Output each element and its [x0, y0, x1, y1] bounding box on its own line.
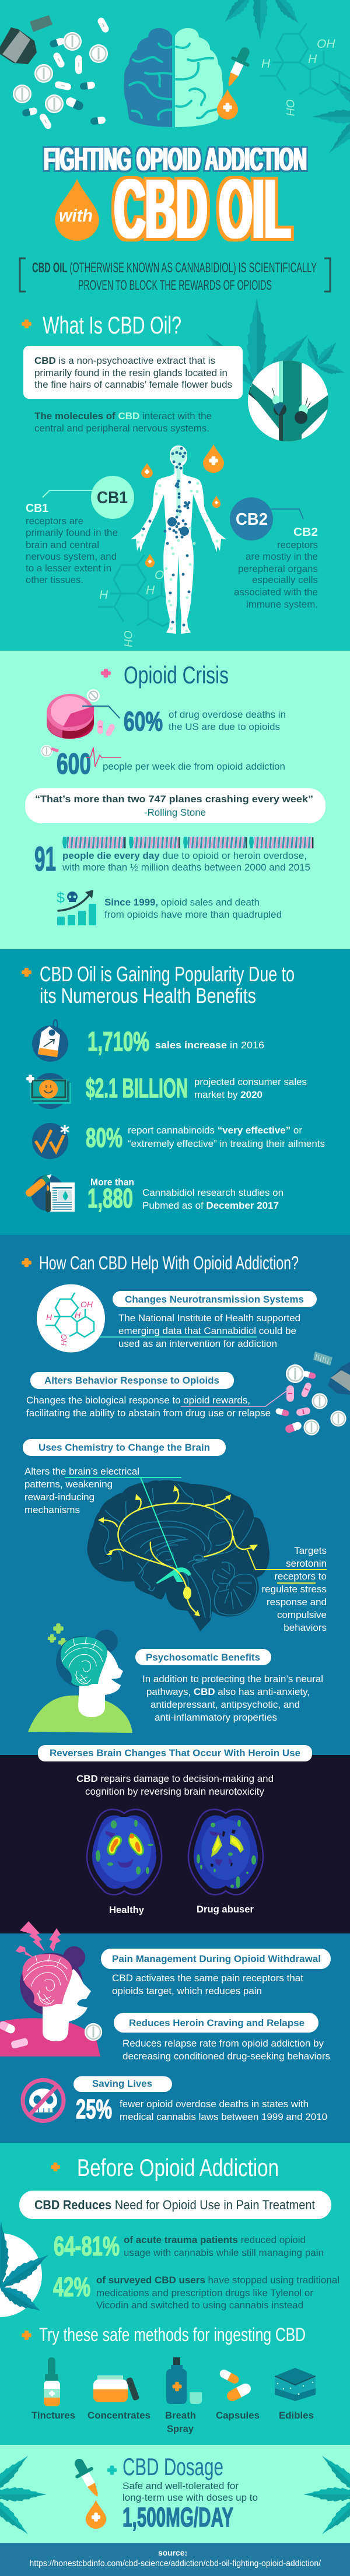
panel: alters behavior: Alters Behavior Response to Opioids: [44, 1375, 219, 1386]
stat: 42%: [53, 2272, 340, 2311]
callout: quote: [25, 788, 326, 823]
stat: 60%: of drug overdose deaths in: [169, 710, 286, 720]
icon: orange drop with "with": [55, 179, 99, 241]
icon: CBD molecule top right: H: [308, 52, 317, 66]
panel: changes neurotransmission: The National Institute of Health supported: [118, 1312, 300, 1324]
stat: 80%: report cannabinoids “very effective” or: [128, 1125, 302, 1136]
panel: saving lives: 25%: [76, 2094, 112, 2124]
callout: CB1: to a lesser extent in: [26, 563, 111, 574]
panel: psychosomatic benefits: antidepressant, antipsychotic, and: [150, 1699, 300, 1710]
stat: 80%: “extremely effective” in treating their ailments: [128, 1138, 325, 1149]
labels: ingestion methods: Breath: [165, 2410, 196, 2421]
panel: reduces heroin craving: Reduces relapse rate from opioid addiction by: [123, 2038, 324, 2049]
panel: psychosomatic benefits: [135, 1649, 323, 1723]
icon: dropper and drop: [68, 2455, 106, 2529]
text: since 1999: [104, 897, 282, 920]
panel: molecule circle: OH: [60, 1334, 68, 1346]
section background: popularity: [0, 949, 350, 1235]
chart: coffin row 91: [62, 837, 313, 848]
panel: saving lives: fewer opioid overdose deaths in states with: [120, 2098, 309, 2110]
title: [44, 141, 307, 256]
stat: 91: 91: [34, 840, 56, 878]
definition box: CBD is a non-psychoactive extract that is: [34, 356, 215, 366]
stat: 80%: 80%: [86, 1122, 123, 1153]
stat: $2.1 billion: market by 2020: [194, 1089, 262, 1100]
text: targets serotonin: receptors to: [274, 1571, 327, 1582]
panel: pain management: Pain Management During Opioid Withdrawal: [112, 1953, 321, 1964]
panel: saving lives: Saving Lives: [92, 2078, 152, 2089]
labels: ingestion methods: Tinctures: [32, 2410, 75, 2421]
section background: before addiction: [0, 2143, 350, 2445]
icon: scattered pills: [13, 16, 110, 130]
icon: tinctures: [44, 2357, 60, 2406]
icon: molecule behind body: OH: [155, 568, 173, 582]
panel: reduces heroin craving: [114, 2013, 330, 2062]
text: targets serotonin: behaviors: [284, 1622, 327, 1633]
icon: money with smiley: [26, 1073, 71, 1109]
stat: 91: people die every day due to opioid or heroin overdose,: [62, 851, 307, 861]
stat: 42%: Vicodin and switched to using cannabis instead: [96, 2300, 303, 2311]
panel: reduces heroin craving: Reduces Heroin Craving and Relapse: [129, 2017, 304, 2028]
text: CBD dosage: 1,500MG/DAY: [123, 2502, 233, 2532]
text: molecules interact: [34, 411, 212, 434]
panel: psychosomatic benefits: In addition to protecting the brain’s neural: [142, 1673, 323, 1684]
panel: saving lives: medical cannabis laws between 1999 and 2010: [120, 2111, 327, 2122]
callout: CB1: [26, 476, 134, 585]
panel: reverses brain changes: cognition by reversing brain neurotoxicity: [85, 1786, 264, 1797]
panel: reverses brain changes: CBD repairs damage to decision-making and: [76, 1773, 274, 1784]
heading: What Is CBD Oil?: What Is CBD Oil?: [43, 311, 181, 339]
panel: alters behavior: [26, 1372, 287, 1419]
panel: changes neurotransmission: [113, 1291, 317, 1349]
panel: uses chemistry: mechanisms: [24, 1504, 80, 1515]
callout: CBD reduces need: CBD Reduces Need for Opioid Use in Pain Treatment: [34, 2198, 315, 2212]
icon: CBD molecule top right: OH: [284, 99, 296, 116]
text: CBD dosage: long-term use with doses up to: [123, 2493, 258, 2503]
stat: 64-81%: [54, 2231, 324, 2261]
heading: CBD Oil is Gaining Popularity: its Numerous Health Benefits: [40, 984, 256, 1008]
labels: ingestion methods: [32, 2410, 314, 2434]
icon: brain left half: [124, 28, 172, 127]
icon: orange drop with "with": with: [59, 205, 93, 226]
illustration: brain cross-section: [65, 1477, 327, 1631]
illustration: head in pain: [0, 1921, 102, 2056]
icon: spilled pill bottle: [0, 15, 52, 64]
callout: CBD reduces need: [19, 2191, 331, 2219]
stat: 1,880 studies: Pubmed as of December 2017: [142, 1200, 279, 1211]
stat: 1,710%: 1,710%: [88, 1026, 149, 1057]
panel: uses chemistry: [23, 1439, 226, 1515]
labels: ingestion methods: Edibles: [279, 2410, 314, 2421]
stat: 1,880 studies: Cannabidiol research studies on: [142, 1187, 284, 1198]
footer: source: https://honestcbdinfo.com/cbd-science/addiction/cbd-oil-fighting-opioid-addiction/: [29, 2559, 321, 2568]
icon: large cannabis leaf behind definition box: [200, 297, 346, 408]
callout: CB1: primarily found in the: [26, 528, 118, 538]
stat: 600: people per week die from opioid addiction: [103, 761, 285, 772]
icon: dropper with oil drop: [217, 44, 256, 120]
heading: Opioid Crisis: [101, 661, 229, 689]
callout: quote: -Rolling Stone: [144, 807, 206, 818]
definition box: primarily found in the resin glands located in: [34, 368, 228, 378]
icon: rising sales chart with skull: [57, 890, 96, 925]
icon: price tag: [32, 1020, 68, 1062]
stat: 80%: [86, 1122, 325, 1153]
text: since 1999: from opioids have more than quadrupled: [104, 910, 282, 920]
stat: 1,710%: [88, 1026, 264, 1057]
panel: changes neurotransmission: used as an intervention for addiction: [118, 1338, 277, 1349]
stat: 42%: 42%: [53, 2272, 90, 2302]
label: healthy / drug abuser: Healthy: [109, 1904, 145, 1915]
stat: 60%: [124, 706, 286, 736]
callout: CB1: CB1: [26, 502, 48, 515]
chart: pie pill 60%: [47, 689, 120, 739]
panel: molecule circle: [37, 1284, 105, 1353]
panel: reduces heroin craving: decreasing conditioned drug-seeking behaviors: [123, 2051, 330, 2062]
stat: 1,880 studies: More than: [90, 1177, 134, 1188]
section background: pain management: [0, 1933, 350, 2143]
stat: 64-81%: usage with cannabis while still managing pain: [124, 2247, 324, 2258]
callout: CB2: perepheral organs: [238, 564, 318, 574]
icon: cannabis leaf in white circle: [0, 2221, 52, 2317]
labels: ingestion methods: Concentrates: [88, 2410, 150, 2421]
text: targets serotonin: regulate stress: [261, 1584, 327, 1595]
icon: no skull: [23, 2080, 64, 2121]
section background: dosage: [0, 2445, 350, 2543]
panel: changes neurotransmission: Changes Neurotransmission Systems: [125, 1294, 304, 1305]
footer: source: [29, 2548, 321, 2568]
panel: molecule circle: OH: [80, 1300, 93, 1309]
icon: oil drops around body: [141, 444, 224, 567]
panel: pain management: opioids target, which reduces pain: [112, 1985, 262, 1996]
stat: 64-81%: 64-81%: [54, 2231, 120, 2261]
callout: CB1: receptors are: [26, 516, 83, 527]
icon: check marks: [32, 1123, 69, 1159]
section background: brain scans: [0, 1755, 350, 1933]
icon: capsules: [218, 2368, 253, 2403]
callout: CB2: receptors: [277, 540, 318, 550]
text: molecules interact: The molecules of CBD interact with the: [34, 411, 212, 422]
stat: 42%: medications and prescription drugs like Tylenol or: [96, 2287, 313, 2298]
stat: 91: [34, 840, 310, 878]
icon: molecule behind body: H: [99, 588, 108, 602]
callout: CB1: other tissues.: [26, 575, 83, 585]
intro text with brackets: [20, 258, 330, 293]
callout: CB2: CB2: [236, 510, 268, 529]
icon: pills and bottle right: [275, 1352, 350, 1436]
text: targets serotonin: [261, 1545, 327, 1633]
stat: 600: 600: [57, 747, 91, 780]
section background: opioid crisis: [0, 651, 350, 949]
label: healthy / drug abuser: [109, 1904, 254, 1915]
panel: uses chemistry: reward-inducing: [24, 1491, 94, 1503]
icon: human body with receptors: [131, 445, 226, 634]
stat: 600: [41, 745, 285, 780]
panel: psychosomatic benefits: Psychosomatic Benefits: [146, 1652, 260, 1663]
stat: 60%: the US are due to opioids: [169, 722, 280, 732]
panel: uses chemistry: patterns, weakening: [24, 1479, 113, 1490]
labels: ingestion methods: Spray: [167, 2423, 194, 2434]
illustration: healthy brain scan: [87, 1809, 162, 1894]
icon: cannabis leaves top right: [220, 0, 350, 157]
section background: how CBD helps: [0, 1235, 350, 1755]
text: targets serotonin: response and: [267, 1596, 327, 1608]
stat: $2.1 billion: $2.1 BILLION: [86, 1073, 188, 1103]
heading: Before Opioid Addiction: Before Opioid Addiction: [77, 2154, 279, 2181]
labels: ingestion methods: Capsules: [216, 2410, 260, 2421]
definition box: the fine hairs of cannabis’ female flower buds: [34, 380, 232, 390]
callout: CB2: are mostly in the: [246, 552, 318, 562]
text: CBD dosage: CBD Dosage: [123, 2453, 223, 2480]
panel: pain management: [101, 1949, 331, 1996]
panel: reverses brain changes: [38, 1745, 312, 1797]
section background: footer: [0, 2543, 350, 2576]
callout: CB1: brain and central: [26, 540, 99, 550]
heading: CBD Oil is Gaining Popularity: [22, 962, 295, 1008]
icon: molecule behind body: OH: [121, 630, 134, 647]
panel: molecule circle: H: [75, 1310, 81, 1319]
illustration: drug abuser brain scan: [188, 1809, 263, 1894]
icon: research paper and vial: [24, 1171, 75, 1212]
panel: psychosomatic benefits: anti-inflammatory properties: [155, 1712, 277, 1723]
callout: CB2: immune system.: [246, 599, 318, 610]
callout: CB2: especially cells: [252, 575, 318, 585]
icon: trichome magnified circle: [248, 360, 328, 442]
icon: edibles: [275, 2368, 316, 2401]
text: CBD dosage: Safe and well-tolerated for: [123, 2481, 239, 2491]
panel: saving lives: [74, 2076, 327, 2124]
stat: 64-81%: of acute trauma patients reduced opioid: [124, 2234, 306, 2245]
icon: cannabis leaves right: [303, 2451, 350, 2539]
panel: uses chemistry: Alters the brain’s electrical: [24, 1466, 139, 1477]
callout: CB2: [230, 497, 318, 610]
callout: CB2: associated with the: [234, 587, 318, 598]
illustration: happy head with brain: [28, 1623, 132, 1733]
panel: reverses brain changes: Reverses Brain Changes That Occur With Heroin Use: [50, 1747, 300, 1759]
stat: 1,710%: sales increase in 2016: [155, 1040, 264, 1051]
heading: Opioid Crisis: Opioid Crisis: [124, 661, 229, 689]
icon: brain right half: [175, 28, 223, 127]
section background: intro: [0, 0, 350, 651]
icon: cannabis leaves left: [0, 2451, 47, 2539]
text: targets serotonin: compulsive: [277, 1609, 327, 1620]
panel: uses chemistry: Uses Chemistry to Change the Brain: [38, 1442, 210, 1453]
panel: pain management: CBD activates the same pain receptors that: [112, 1973, 303, 1984]
icon: rising sales chart with skull: $: [57, 890, 65, 906]
stat: 91: with more than ½ million deaths between 2000 and 2015: [62, 862, 310, 873]
icon: CBD molecule top right: OH: [317, 37, 335, 51]
stat: 1,880 studies: [88, 1177, 284, 1213]
label: healthy / drug abuser: Drug abuser: [197, 1904, 254, 1915]
stat: 42%: of surveyed CBD users have stopped using traditional: [96, 2275, 340, 2286]
underline connector: [99, 1336, 257, 1338]
heading: What Is CBD Oil?: [22, 311, 181, 339]
text: targets serotonin: Targets: [294, 1545, 327, 1556]
icon: molecule behind body: [98, 554, 177, 647]
icon: molecule behind body: H: [146, 584, 155, 597]
callout: CB2: CB2: [293, 526, 318, 539]
panel: psychosomatic benefits: pathways, CBD also has anti-anxiety,: [146, 1686, 310, 1697]
callout: CB1: nervous system, and: [26, 552, 117, 562]
text: molecules interact: central and peripheral nervous systems.: [34, 423, 209, 434]
text: targets serotonin: serotonin: [286, 1558, 327, 1569]
footer: source: source:: [158, 2548, 187, 2557]
icon: CBD molecule top right: H: [261, 57, 271, 71]
text: CBD dosage: [107, 2453, 258, 2532]
icon: CBD molecule top right: [260, 23, 350, 116]
callout: quote: “That’s more than two 747 planes crashing every week”: [35, 794, 313, 805]
callout: CB1: CB1: [97, 489, 128, 507]
stat: 1,880 studies: 1,880: [88, 1183, 133, 1213]
panel: changes neurotransmission: emerging data that Cannabidiol could be: [118, 1325, 296, 1336]
panel: alters behavior: Changes the biological response to opioid rewards,: [26, 1395, 250, 1406]
panel: molecule circle: H: [46, 1312, 52, 1322]
panel: alters behavior: facilitating the ability to abstain from drug use or relapse: [26, 1408, 271, 1419]
stat: 60%: 60%: [124, 706, 163, 736]
text: since 1999: Since 1999, opioid sales and death: [104, 897, 260, 908]
icon: breath spray: [166, 2357, 202, 2404]
stat: $2.1 billion: projected consumer sales: [194, 1076, 307, 1087]
icon: concentrates: [93, 2375, 140, 2402]
definition box: [23, 346, 243, 399]
